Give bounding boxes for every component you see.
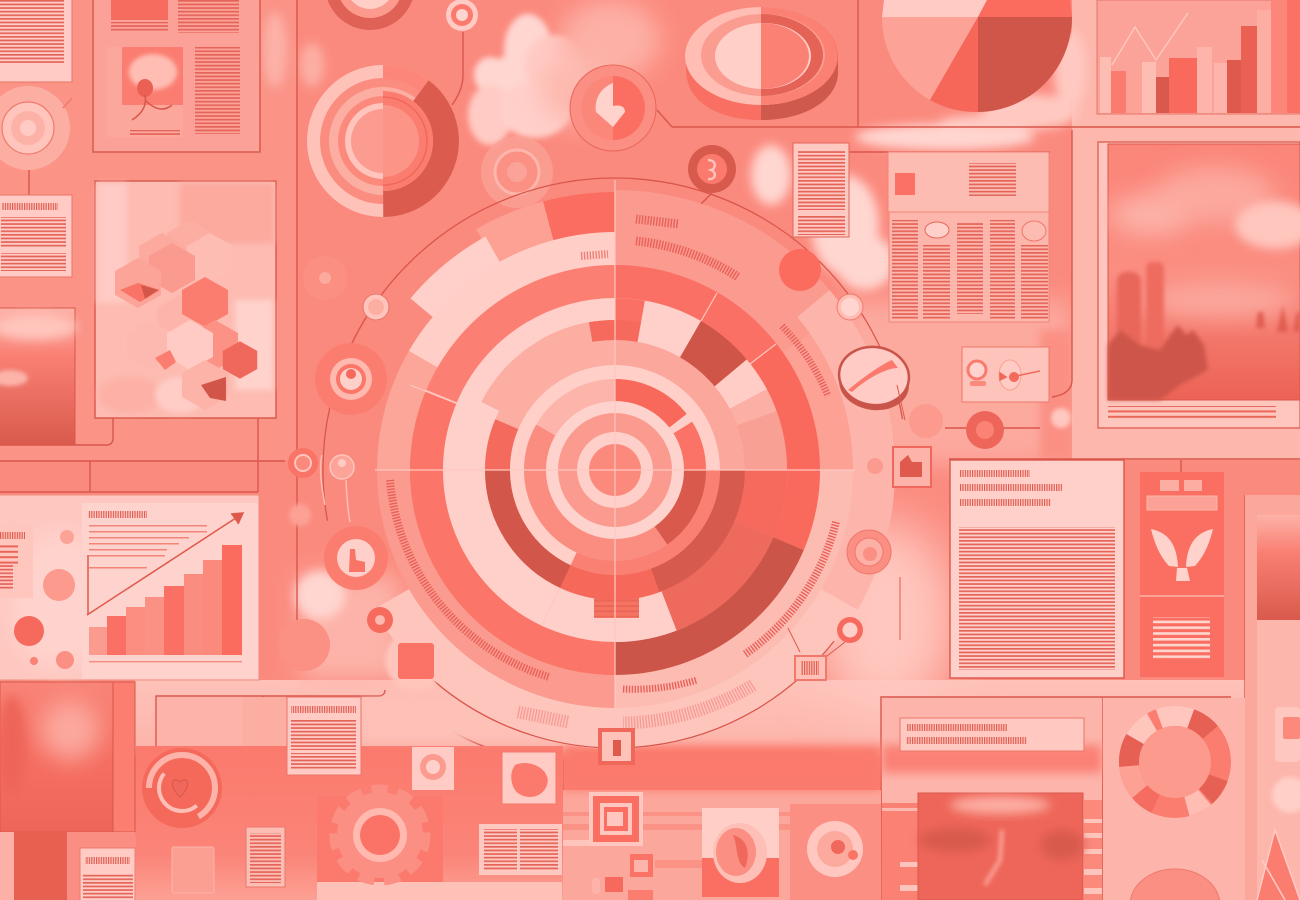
- outer arcs: [225, 80, 1005, 860]
- icon: small squares: [592, 854, 653, 900]
- icon: small square node: [788, 628, 845, 680]
- band B: [459, 314, 771, 626]
- centre rings: [546, 401, 684, 539]
- icon: square spiral: [589, 792, 643, 846]
- image: big red landscape: [1098, 142, 1300, 428]
- icon: red sphere: [779, 249, 821, 291]
- panel: right column: [1245, 495, 1300, 900]
- panel: table card: [888, 152, 1049, 322]
- panel: two column doc: [479, 824, 562, 875]
- icon: bottom square node: [600, 730, 633, 763]
- panel: large text page: [950, 460, 1124, 678]
- panel: left text card: [0, 195, 72, 277]
- connector: right vertical: [897, 385, 905, 640]
- dots: [14, 530, 75, 669]
- panel: gear: [317, 789, 562, 900]
- chart: segmented life-ring: [1103, 697, 1245, 900]
- icon: soft node: [909, 404, 943, 438]
- panel: tile with ring: [790, 804, 881, 900]
- icon: tile with ring: [412, 747, 454, 790]
- icon: target node: [315, 343, 387, 415]
- chart: concentric radial ring: [225, 80, 1005, 860]
- separator ring: [485, 340, 745, 600]
- icon: node left top: [303, 256, 347, 300]
- heading card: [900, 718, 1084, 751]
- icon: circle bottom: [1130, 869, 1220, 900]
- panel: red badge with wings: [1140, 472, 1224, 677]
- icon: heart dial: [142, 748, 222, 828]
- icon: red node: [288, 448, 318, 478]
- icon: magnifying dish: [835, 342, 913, 415]
- panel: small icon card: [962, 347, 1049, 402]
- icon: dark small medallion: [688, 145, 736, 193]
- chart: top right bars: [1097, 0, 1300, 114]
- chart: large ring dial: [295, 53, 471, 229]
- panel: small doc bottom left: [80, 848, 135, 900]
- hexagon cluster: [115, 220, 257, 410]
- band C: [398, 253, 832, 687]
- image: red landscape left: [0, 308, 77, 445]
- panel: doc bottom: [287, 697, 361, 775]
- arrow: [87, 513, 243, 615]
- bar chart: [89, 545, 242, 662]
- panel: chart card: [0, 495, 259, 680]
- icon: hand badge: [324, 526, 388, 590]
- panel: tile with egg: [702, 808, 779, 897]
- icon: pale target left: [0, 86, 72, 170]
- panel: top-left document: [0, 0, 72, 82]
- icon: pale bead: [330, 455, 354, 479]
- icon: leaf dial: [570, 65, 656, 151]
- connector curve left: [321, 455, 350, 522]
- panel: narrow text doc: [793, 143, 849, 237]
- panel: magazine page with flower image: [93, 0, 260, 152]
- image: lake landscape: [918, 793, 1084, 900]
- text lines: [89, 525, 207, 568]
- text snippet: [0, 525, 33, 598]
- icon: faint square: [172, 847, 214, 893]
- icon: pale node: [363, 294, 389, 320]
- icon: tiny node: [867, 458, 883, 474]
- icon: tile with blob: [502, 752, 556, 804]
- heading: [88, 511, 147, 518]
- icon: red ring node: [837, 617, 863, 643]
- icon: red eye node: [367, 607, 393, 633]
- panel: bottom middle sky wash: [136, 697, 563, 900]
- outer annotation band: [252, 107, 978, 833]
- chart: 3D ellipse donut: [685, 7, 838, 120]
- icon: pale dot: [1051, 408, 1071, 428]
- ring annotation pseudo text: [390, 219, 836, 723]
- icon: faint dot: [289, 504, 311, 526]
- panel: lower-right card: [882, 698, 1102, 900]
- chart: pie: [882, 0, 1072, 112]
- icon: top partial dark ring: [325, 0, 415, 30]
- icon: red bead: [966, 411, 1004, 449]
- panel: hexagon pattern image: [95, 181, 276, 418]
- image: bottom-left red landscape: [0, 682, 135, 900]
- panel: small doc: [246, 827, 285, 887]
- icon: wings: [1151, 529, 1213, 581]
- clouds: [263, 0, 1086, 619]
- band A: [503, 358, 727, 582]
- icon: salmon sphere: [278, 619, 330, 671]
- icon: square badge right: [893, 447, 931, 487]
- bottom horizon stripes: [563, 745, 881, 900]
- icon: faint ring: [481, 136, 553, 208]
- icon: square node left: [385, 630, 445, 690]
- band D: [350, 205, 880, 735]
- icon: small ring top: [446, 0, 478, 31]
- icon: swirl node: [847, 530, 891, 574]
- icon: pale node right: [837, 294, 863, 320]
